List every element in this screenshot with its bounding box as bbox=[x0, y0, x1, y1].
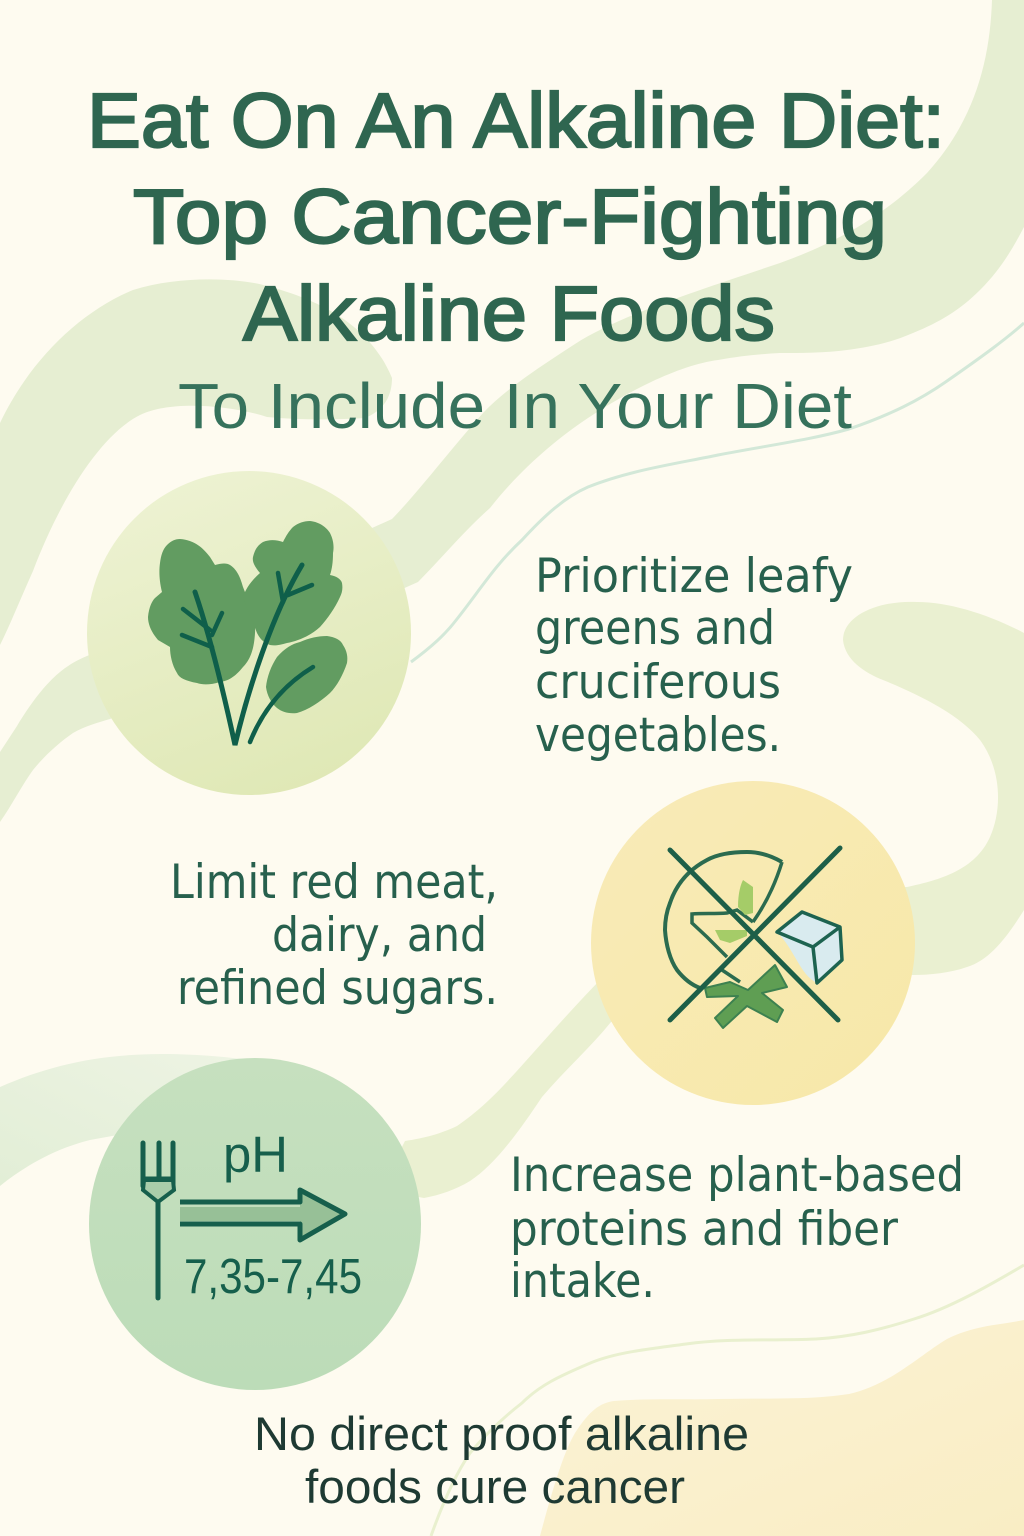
text: limit foods bbox=[170, 855, 498, 1016]
text: limit foods: Limit red meat, bbox=[170, 855, 498, 910]
icon: pH arrow bbox=[180, 1190, 345, 1240]
text: limit foods: refined sugars. bbox=[177, 961, 498, 1016]
panel: plant proteins bbox=[89, 1058, 964, 1390]
plant proteins circle bbox=[89, 1058, 421, 1390]
subtitle: To Include In Your Diet bbox=[178, 370, 852, 442]
corner blob bbox=[540, 1320, 1024, 1536]
label: pH: pH bbox=[223, 1126, 288, 1183]
footer note: No direct proof alkaline bbox=[254, 1407, 749, 1460]
thin background line bbox=[431, 1265, 1024, 1536]
panel: limit foods bbox=[170, 781, 915, 1105]
footer note: foods cure cancer bbox=[305, 1460, 685, 1513]
title: Eat On An Alkaline Diet: bbox=[87, 78, 945, 164]
limit foods circle bbox=[591, 781, 915, 1105]
title: Top Cancer-Fighting bbox=[133, 174, 887, 260]
label: pH range: 7,35-7,45 bbox=[184, 1250, 362, 1304]
text: prioritize greens: cruciferous bbox=[535, 655, 781, 710]
text: plant proteins bbox=[510, 1148, 964, 1309]
leafy greens circle bbox=[87, 471, 411, 795]
footer note bbox=[254, 1407, 749, 1513]
panel: leafy greens bbox=[87, 471, 853, 795]
icon: leaves bbox=[148, 521, 347, 745]
text: limit foods: dairy, and bbox=[272, 908, 487, 963]
text: plant proteins: intake. bbox=[510, 1254, 655, 1309]
background swooshes bbox=[0, 0, 1024, 1198]
title: Alkaline Foods bbox=[243, 271, 775, 357]
text: plant proteins: proteins and fiber bbox=[510, 1202, 899, 1257]
icon: crossed out foods bbox=[665, 848, 842, 1028]
text: prioritize greens: greens and bbox=[535, 601, 775, 656]
title bbox=[87, 78, 945, 357]
text: prioritize greens bbox=[535, 549, 853, 763]
icon: fork bbox=[143, 1143, 174, 1298]
text: plant proteins: Increase plant-based bbox=[510, 1148, 964, 1203]
text: prioritize greens: vegetables. bbox=[535, 708, 781, 763]
text: prioritize greens: Prioritize leafy bbox=[535, 549, 853, 604]
